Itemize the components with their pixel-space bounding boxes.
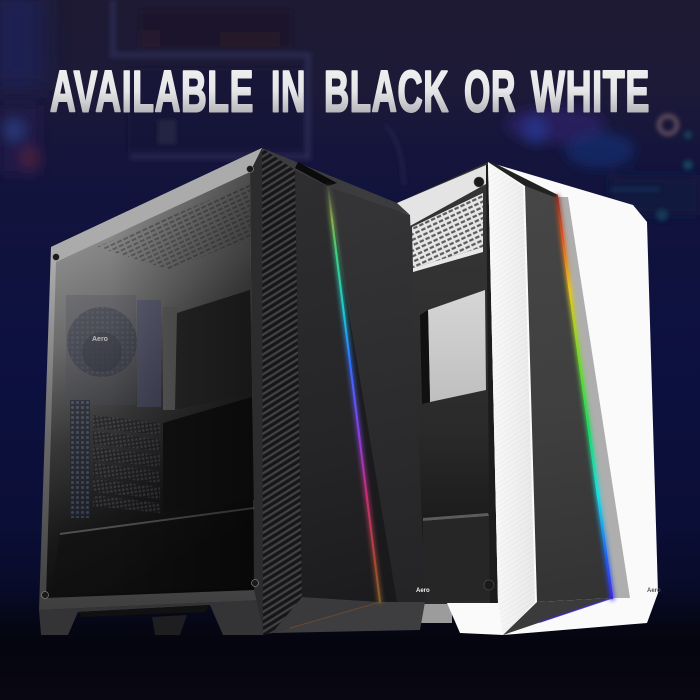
top mesh	[97, 183, 250, 270]
title: IN	[271, 60, 306, 124]
white case shadow facet	[557, 197, 630, 598]
black case interior	[46, 172, 254, 598]
white case logo: Aero	[647, 588, 661, 594]
white case carbon strip	[488, 162, 535, 635]
wall shelf	[113, 0, 310, 160]
black case right frame edge	[250, 148, 264, 633]
left curtain glow	[0, 0, 45, 90]
black case bottom facets	[272, 597, 380, 633]
rear fan	[66, 295, 137, 405]
black case front panel right	[328, 187, 425, 602]
black case glass panel	[46, 172, 254, 598]
room left colored lights	[0, 105, 42, 175]
black case screws	[42, 166, 258, 598]
white case screws	[474, 177, 494, 590]
white case dark front panel	[525, 186, 612, 602]
title: AVAILABLE	[50, 60, 254, 124]
black case RGB light strip	[290, 187, 380, 628]
white case top dark trim	[488, 162, 558, 198]
black case side panel frame	[39, 148, 264, 635]
title: BLACK	[324, 60, 449, 124]
black case base and feet	[39, 600, 264, 635]
rear blue mesh	[70, 400, 90, 518]
black PC case	[39, 148, 430, 635]
white case small rear foot	[417, 600, 452, 623]
black case logo: Aero	[416, 588, 430, 594]
room right glow and monitor	[505, 107, 700, 215]
chair silhouette	[385, 125, 404, 185]
rear fan: Aero	[92, 336, 108, 343]
black case dark wedge beside light strip	[328, 187, 397, 602]
title	[50, 60, 650, 124]
PSU shroud window	[175, 290, 252, 410]
white case bottom facet	[503, 598, 612, 635]
black case front panel left	[295, 170, 380, 602]
white PC case	[397, 162, 661, 635]
black case carbon strip	[262, 148, 302, 635]
title: OR	[464, 60, 516, 124]
lower plate	[163, 397, 254, 512]
glass right-side shading	[46, 172, 254, 598]
black case top edge	[262, 148, 410, 215]
white case side panel	[397, 162, 500, 604]
white case body	[447, 162, 658, 635]
PCI slots	[93, 415, 160, 513]
white case RGB light strip	[540, 197, 612, 622]
cooler radiator	[137, 300, 161, 407]
bracket	[163, 307, 177, 410]
floor fade	[0, 590, 700, 700]
shroud line	[60, 507, 254, 535]
